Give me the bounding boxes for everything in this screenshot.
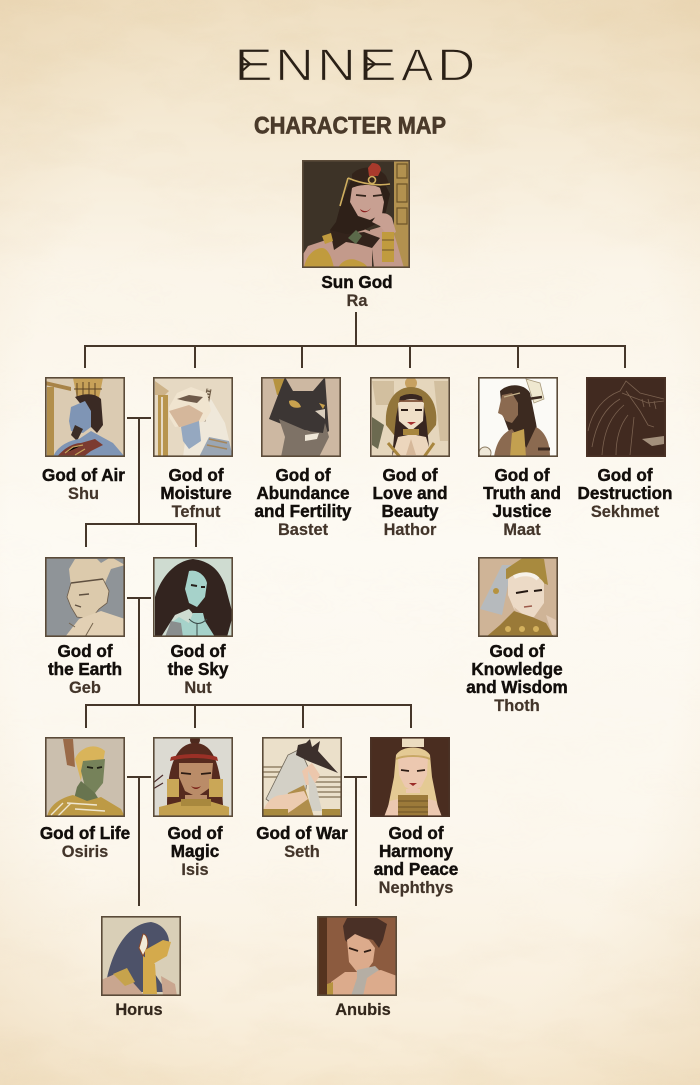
portrait: Isis <box>153 737 233 817</box>
card: Nut <box>153 557 233 697</box>
portrait: Thoth <box>478 557 558 637</box>
portrait: Tefnut <box>153 377 233 457</box>
portrait: Horus <box>101 916 181 996</box>
portrait: Nut <box>153 557 233 637</box>
card: Tefnut <box>153 377 233 521</box>
name: Isis: Isis <box>181 861 209 879</box>
portrait: Osiris <box>45 737 125 817</box>
label: God of the Sky: God of <box>170 642 226 661</box>
label: God of Knowledge and Wisdom: God of <box>489 642 545 661</box>
portrait: Anubis <box>317 916 397 996</box>
label: God of Harmony and Peace: God of <box>388 824 444 843</box>
name: Nephthys: Nephthys <box>379 879 453 897</box>
title: ENNEAD: D <box>437 40 475 91</box>
label: Horus: Horus <box>115 1001 163 1019</box>
portrait: Geb <box>45 557 125 637</box>
card: Ra <box>302 160 410 310</box>
label: God of Air: God of Air <box>42 466 125 485</box>
label: God of War: God of War <box>256 824 348 843</box>
card: Nephthys <box>370 737 458 897</box>
name: Maat: Maat <box>503 521 541 539</box>
card: Hathor: Beauty <box>382 502 439 521</box>
label: Sun God: Sun God <box>321 273 393 292</box>
label: Anubis: Anubis <box>335 1001 391 1019</box>
label: God of Abundance and Fertility: God of <box>275 466 331 485</box>
name: Shu: Shu <box>68 485 99 503</box>
family tree connector lines <box>85 312 625 906</box>
title: ENNEAD <box>234 40 475 91</box>
card: Maat <box>478 377 561 539</box>
card: Nephthys: and Peace <box>374 860 458 879</box>
title: ENNEAD: E <box>234 41 273 91</box>
title: ENNEAD: A <box>401 40 434 90</box>
card: Sekhmet <box>578 377 672 521</box>
portrait: Maat <box>478 377 558 457</box>
name: Nut: Nut <box>184 679 212 697</box>
portrait: Ra <box>302 160 410 268</box>
label: God of Truth and Justice: God of <box>494 466 550 485</box>
card: Bastet: and Fertility <box>255 502 352 521</box>
card: Geb <box>45 557 125 697</box>
card: Horus <box>101 916 181 1019</box>
title: ENNEAD: E <box>358 41 397 91</box>
card: Shu <box>42 377 125 503</box>
name: Tefnut: Tefnut <box>172 503 221 521</box>
card: Maat: Truth and <box>483 484 561 503</box>
card: Isis <box>153 735 233 879</box>
portrait: Bastet <box>261 377 341 457</box>
label: God of Magic: God of <box>167 824 223 843</box>
portrait: Hathor <box>370 377 450 457</box>
name: Bastet: Bastet <box>278 521 329 539</box>
card: Bastet: Abundance <box>256 484 350 503</box>
card: Sekhmet: Destruction <box>578 484 672 503</box>
card: Nut: the Sky <box>168 660 229 679</box>
card: Maat: Justice <box>493 502 551 521</box>
card: Bastet <box>255 377 352 539</box>
card: Anubis <box>317 916 397 1019</box>
card: Hathor <box>370 377 450 539</box>
portrait: Nephthys <box>370 737 450 817</box>
card: Thoth: Knowledge <box>471 660 563 679</box>
card: Thoth: and Wisdom <box>466 678 568 697</box>
card: Nephthys: Harmony <box>379 842 454 861</box>
label: God of the Earth: God of <box>57 642 113 661</box>
card: Tefnut: Moisture <box>160 484 232 503</box>
card: Isis: Magic <box>171 842 219 861</box>
label: God of Love and Beauty: God of <box>382 466 438 485</box>
title: ENNEAD: N <box>275 40 314 90</box>
name: Seth: Seth <box>284 843 320 861</box>
portrait: Sekhmet <box>586 377 666 457</box>
label: God of Moisture: God of <box>168 466 224 485</box>
card: Seth <box>256 737 348 861</box>
card: Thoth <box>466 557 568 715</box>
name: Hathor: Hathor <box>384 521 437 539</box>
name: Sekhmet: Sekhmet <box>591 503 660 521</box>
heading: character map: CHARACTER MAP <box>254 112 446 140</box>
name: Thoth: Thoth <box>494 697 540 715</box>
name: Ra: Ra <box>347 292 368 310</box>
name: Geb: Geb <box>69 679 101 697</box>
label: God of Life: God of Life <box>40 824 130 843</box>
portrait: Seth <box>262 737 342 817</box>
label: God of Destruction: God of <box>597 466 653 485</box>
portrait: Shu <box>45 377 125 457</box>
name: Osiris: Osiris <box>62 843 108 861</box>
title: ENNEAD: N <box>317 40 356 90</box>
card: Osiris <box>40 737 130 861</box>
card: Geb: the Earth <box>48 660 122 679</box>
card: Hathor: Love and <box>372 484 448 503</box>
